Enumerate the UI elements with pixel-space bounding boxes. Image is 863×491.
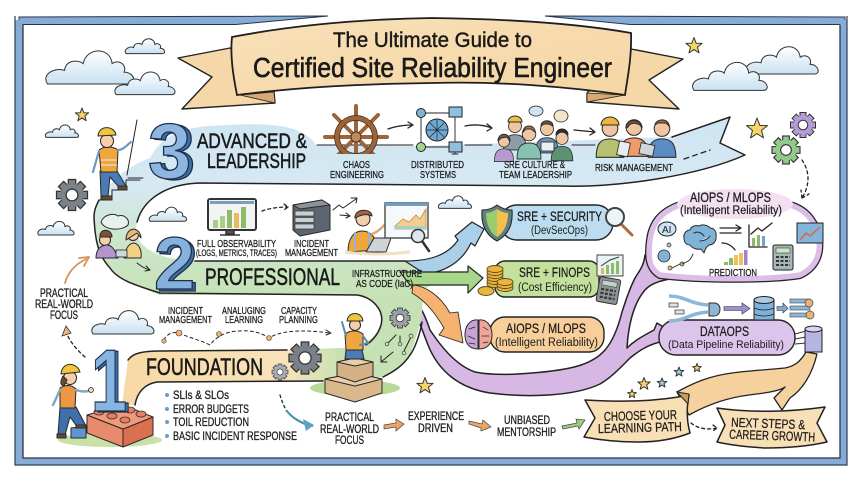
foundation top labels: LEARNING bbox=[225, 314, 263, 326]
arrow: green to finops bbox=[400, 266, 483, 293]
heading: advanced and leadership: ADVANCED & bbox=[197, 130, 307, 153]
upper box bbox=[337, 358, 373, 382]
icon: brain bbox=[684, 225, 716, 253]
foundation bullet list: ERROR BUDGETS bbox=[173, 402, 249, 416]
step block bbox=[71, 426, 86, 438]
icon: blue trend card bbox=[797, 223, 823, 243]
observability label: FULL OBSERVABILITY bbox=[197, 238, 276, 250]
heading: professional: PROFESSIONAL bbox=[205, 264, 340, 291]
hard hat bbox=[98, 128, 116, 136]
icon: distributed network bbox=[416, 107, 462, 154]
head bbox=[100, 134, 114, 148]
banner: next steps bbox=[717, 407, 827, 448]
legs bbox=[58, 407, 86, 435]
pill: aiops bbox=[465, 317, 604, 352]
arrow dashed bbox=[262, 204, 288, 211]
legs bbox=[345, 350, 364, 359]
gears top right and left bbox=[56, 112, 816, 210]
heading: advanced and leadership bbox=[197, 130, 307, 173]
pill: aiops: AIOPS / MLOPS bbox=[506, 320, 586, 336]
arrow bbox=[777, 303, 788, 313]
arrow green bbox=[562, 419, 585, 429]
icon: list output bbox=[790, 299, 814, 319]
foundation top labels: CAPACITY bbox=[281, 305, 317, 317]
icon: brain bbox=[465, 320, 492, 349]
arrow bbox=[724, 303, 750, 314]
label: experience driven: DRIVEN bbox=[418, 421, 453, 435]
foundation top labels bbox=[159, 305, 318, 326]
wash under wheel bbox=[326, 154, 386, 164]
label wash bbox=[677, 189, 793, 219]
icon: monitor bbox=[208, 199, 256, 235]
banner: choose your learning path: LEARNING PATH bbox=[598, 419, 682, 436]
level 3 numeral: 3 bbox=[152, 108, 195, 196]
ribbon: foundation bbox=[122, 350, 345, 405]
left focus label: FOCUS bbox=[50, 310, 78, 322]
label: practical real-world focus: FOCUS bbox=[335, 433, 364, 447]
title line 1: The Ultimate Guide to bbox=[333, 29, 532, 52]
dashed arrow bbox=[691, 423, 717, 431]
observability label: (LOGS, METRICS, TRACES) bbox=[196, 248, 277, 258]
dashed arrow bbox=[66, 332, 85, 357]
foundation top labels: INCIDENT bbox=[168, 305, 203, 317]
stairs bbox=[99, 178, 143, 200]
foundation bullet list bbox=[165, 388, 297, 443]
icon: network nodes bbox=[658, 243, 693, 270]
worker climbing stairs level 3 bbox=[93, 120, 143, 200]
left focus label: PRACTICAL bbox=[40, 288, 88, 300]
icon: calculator bbox=[773, 245, 793, 270]
label: unbiased mentorship bbox=[497, 413, 556, 439]
hard hat bbox=[61, 364, 80, 374]
label: unbiased mentorship: MENTORSHIP bbox=[497, 425, 556, 439]
right tail bbox=[587, 49, 683, 109]
level 1 numeral: 1 bbox=[91, 331, 127, 430]
dashed arrow to AIOps panel bbox=[801, 160, 809, 198]
iac label bbox=[352, 268, 422, 290]
foundation top labels: MANAGEMENT bbox=[159, 314, 212, 326]
panel heading: AIOPS / MLOPS bbox=[690, 189, 771, 205]
foundation bullet list: SLIs & SLOs bbox=[173, 388, 229, 402]
banner: next steps: NEXT STEPS & bbox=[731, 415, 806, 432]
pill: dataops: DATAOPS bbox=[700, 323, 749, 339]
foundation bullet list: BASIC INCIDENT RESPONSE bbox=[173, 429, 297, 443]
level 2 numeral: 2 bbox=[154, 222, 195, 305]
legs bbox=[100, 171, 126, 196]
engineer at laptop bbox=[345, 210, 410, 254]
lower box bbox=[325, 373, 382, 402]
foundation top labels: ANALUGING bbox=[222, 305, 266, 317]
worker climbing brick bbox=[53, 364, 94, 438]
label: practical real-world focus: REAL-WORLD bbox=[320, 422, 379, 436]
grass bbox=[310, 380, 400, 396]
foundation bullet list: TOIL REDUCTION bbox=[173, 415, 249, 429]
label: practical real-world focus bbox=[320, 410, 379, 447]
icon: server bbox=[293, 200, 330, 236]
observability label bbox=[196, 238, 277, 258]
pill: finops: SRE + FINOPS bbox=[519, 264, 590, 280]
pill: dataops: (Data Pipeline Reliability) bbox=[668, 339, 784, 351]
icon: ship wheel bbox=[325, 106, 387, 159]
blue dashed arrow bbox=[280, 395, 314, 431]
clouds and stars bbox=[38, 38, 818, 398]
risk management label: RISK MANAGEMENT bbox=[595, 162, 673, 174]
label: unbiased mentorship: UNBIASED bbox=[504, 413, 550, 427]
icon: team bbox=[494, 106, 573, 162]
arm with pole bbox=[93, 142, 131, 172]
banner body bbox=[231, 18, 631, 95]
title line 2: Certified Site Reliability Engineer bbox=[253, 52, 612, 83]
pill: dataops bbox=[659, 320, 795, 355]
chaos engineering label bbox=[330, 159, 384, 181]
green loop gear and circuit bbox=[381, 308, 413, 362]
heading: foundation: FOUNDATION bbox=[146, 354, 263, 381]
left tail bbox=[178, 48, 275, 109]
arrow up orange bbox=[65, 257, 89, 283]
banner: choose your learning path: CHOOSE YOUR bbox=[604, 407, 677, 424]
left focus label: REAL-WORLD bbox=[35, 299, 93, 311]
arrow: blue to security bbox=[405, 222, 484, 274]
chaos engineering label: CHAOS bbox=[343, 159, 370, 171]
arrows from brain bbox=[720, 225, 741, 250]
chaos engineering label: ENGINEERING bbox=[330, 169, 384, 181]
arrow head bbox=[62, 326, 71, 336]
panel: top AIOps MLOps bbox=[649, 189, 823, 279]
worker on blocks bbox=[310, 314, 400, 402]
culture label: TEAM LEADERSHIP bbox=[499, 169, 572, 181]
arrow bbox=[388, 122, 413, 129]
label: practical real-world focus: PRACTICAL bbox=[325, 410, 374, 424]
culture label: SRE CULTURE & bbox=[504, 159, 565, 171]
iac label: INFRASTRUCTURE bbox=[352, 268, 422, 280]
icon: AI bubble: AI bbox=[662, 225, 671, 236]
banner: next steps: CAREER GROWTH bbox=[729, 427, 815, 445]
icon: data pipeline bbox=[669, 296, 720, 321]
incident management label: MANAGEMENT bbox=[285, 247, 338, 259]
pill: security: (DevSecOps) bbox=[531, 225, 588, 237]
icon: chart card bbox=[597, 255, 623, 276]
arrow: orange to aiops bbox=[412, 285, 463, 343]
icon: risk management team bbox=[596, 117, 676, 157]
banner: choose your learning path bbox=[584, 392, 690, 442]
icon: magnifier bbox=[606, 208, 632, 235]
heading: advanced and leadership: LEADERSHIP bbox=[207, 150, 306, 173]
icon: prediction bars bbox=[724, 250, 748, 265]
distributed systems label: DISTRIBUTED bbox=[411, 159, 464, 171]
icon: coins bbox=[478, 266, 513, 296]
arrow bbox=[465, 124, 492, 131]
left focus label bbox=[35, 288, 93, 322]
lego brick with numeral 1 bbox=[58, 331, 162, 447]
arrows zigzag bbox=[333, 198, 357, 218]
icon: shield bbox=[482, 205, 512, 241]
body bbox=[345, 331, 363, 350]
label: experience driven: EXPERIENCE bbox=[408, 409, 464, 423]
left fold bbox=[240, 92, 275, 103]
head bbox=[64, 372, 76, 384]
icon: AI bubble bbox=[658, 222, 676, 236]
level 2 numeral: 2 bbox=[157, 224, 198, 307]
pill: finops: (Cost Efficiency) bbox=[518, 282, 592, 294]
foundation top labels: PLANNING bbox=[279, 314, 318, 326]
arms bbox=[342, 322, 368, 345]
pill: aiops: (Intelligent Reliability) bbox=[495, 337, 598, 349]
culture label bbox=[499, 159, 572, 181]
pill: security bbox=[482, 205, 632, 241]
head bbox=[350, 320, 360, 330]
panel subheading: (Intelligent Reliability) bbox=[680, 205, 782, 217]
hard hat bbox=[347, 314, 363, 321]
icon: cylinder bbox=[795, 326, 822, 352]
arrow orange bbox=[469, 420, 491, 431]
title banner bbox=[178, 18, 683, 109]
level 3 numeral: 3 bbox=[148, 107, 191, 195]
right fold bbox=[587, 93, 625, 102]
foundation gears bbox=[272, 342, 321, 380]
arrow bbox=[574, 128, 595, 135]
ribbon: levels 3 and 2 path bbox=[94, 117, 745, 381]
icon: database bbox=[754, 296, 774, 320]
icon: line chart bbox=[749, 223, 772, 247]
body bbox=[99, 147, 118, 172]
body bbox=[60, 385, 76, 408]
icon: analytics panel bbox=[385, 203, 428, 238]
arms bbox=[53, 390, 91, 405]
pill: security: SRE + SECURITY bbox=[517, 208, 602, 224]
thought group figures bbox=[96, 214, 150, 271]
distributed systems label: SYSTEMS bbox=[420, 169, 456, 181]
arrow orange bbox=[384, 419, 404, 431]
iac label: AS CODE (IaC) bbox=[356, 278, 413, 290]
tan ribbon to next steps bbox=[677, 352, 817, 415]
incident management label: INCIDENT bbox=[294, 238, 329, 250]
label: experience driven bbox=[408, 409, 464, 435]
arrow bbox=[137, 263, 150, 271]
icon: magnifier bbox=[412, 230, 429, 251]
icon: calculator bbox=[596, 276, 621, 305]
purple pathway to AIOps and DataOps bbox=[398, 255, 680, 396]
pill: finops bbox=[478, 255, 623, 305]
distributed systems label bbox=[411, 159, 464, 181]
ribbon edge lines bbox=[94, 117, 745, 377]
dashed path with pins bbox=[162, 330, 331, 345]
incident management label bbox=[285, 238, 338, 259]
prediction label: PREDICTION bbox=[709, 267, 757, 279]
level 1 numeral: 1 bbox=[94, 332, 130, 431]
